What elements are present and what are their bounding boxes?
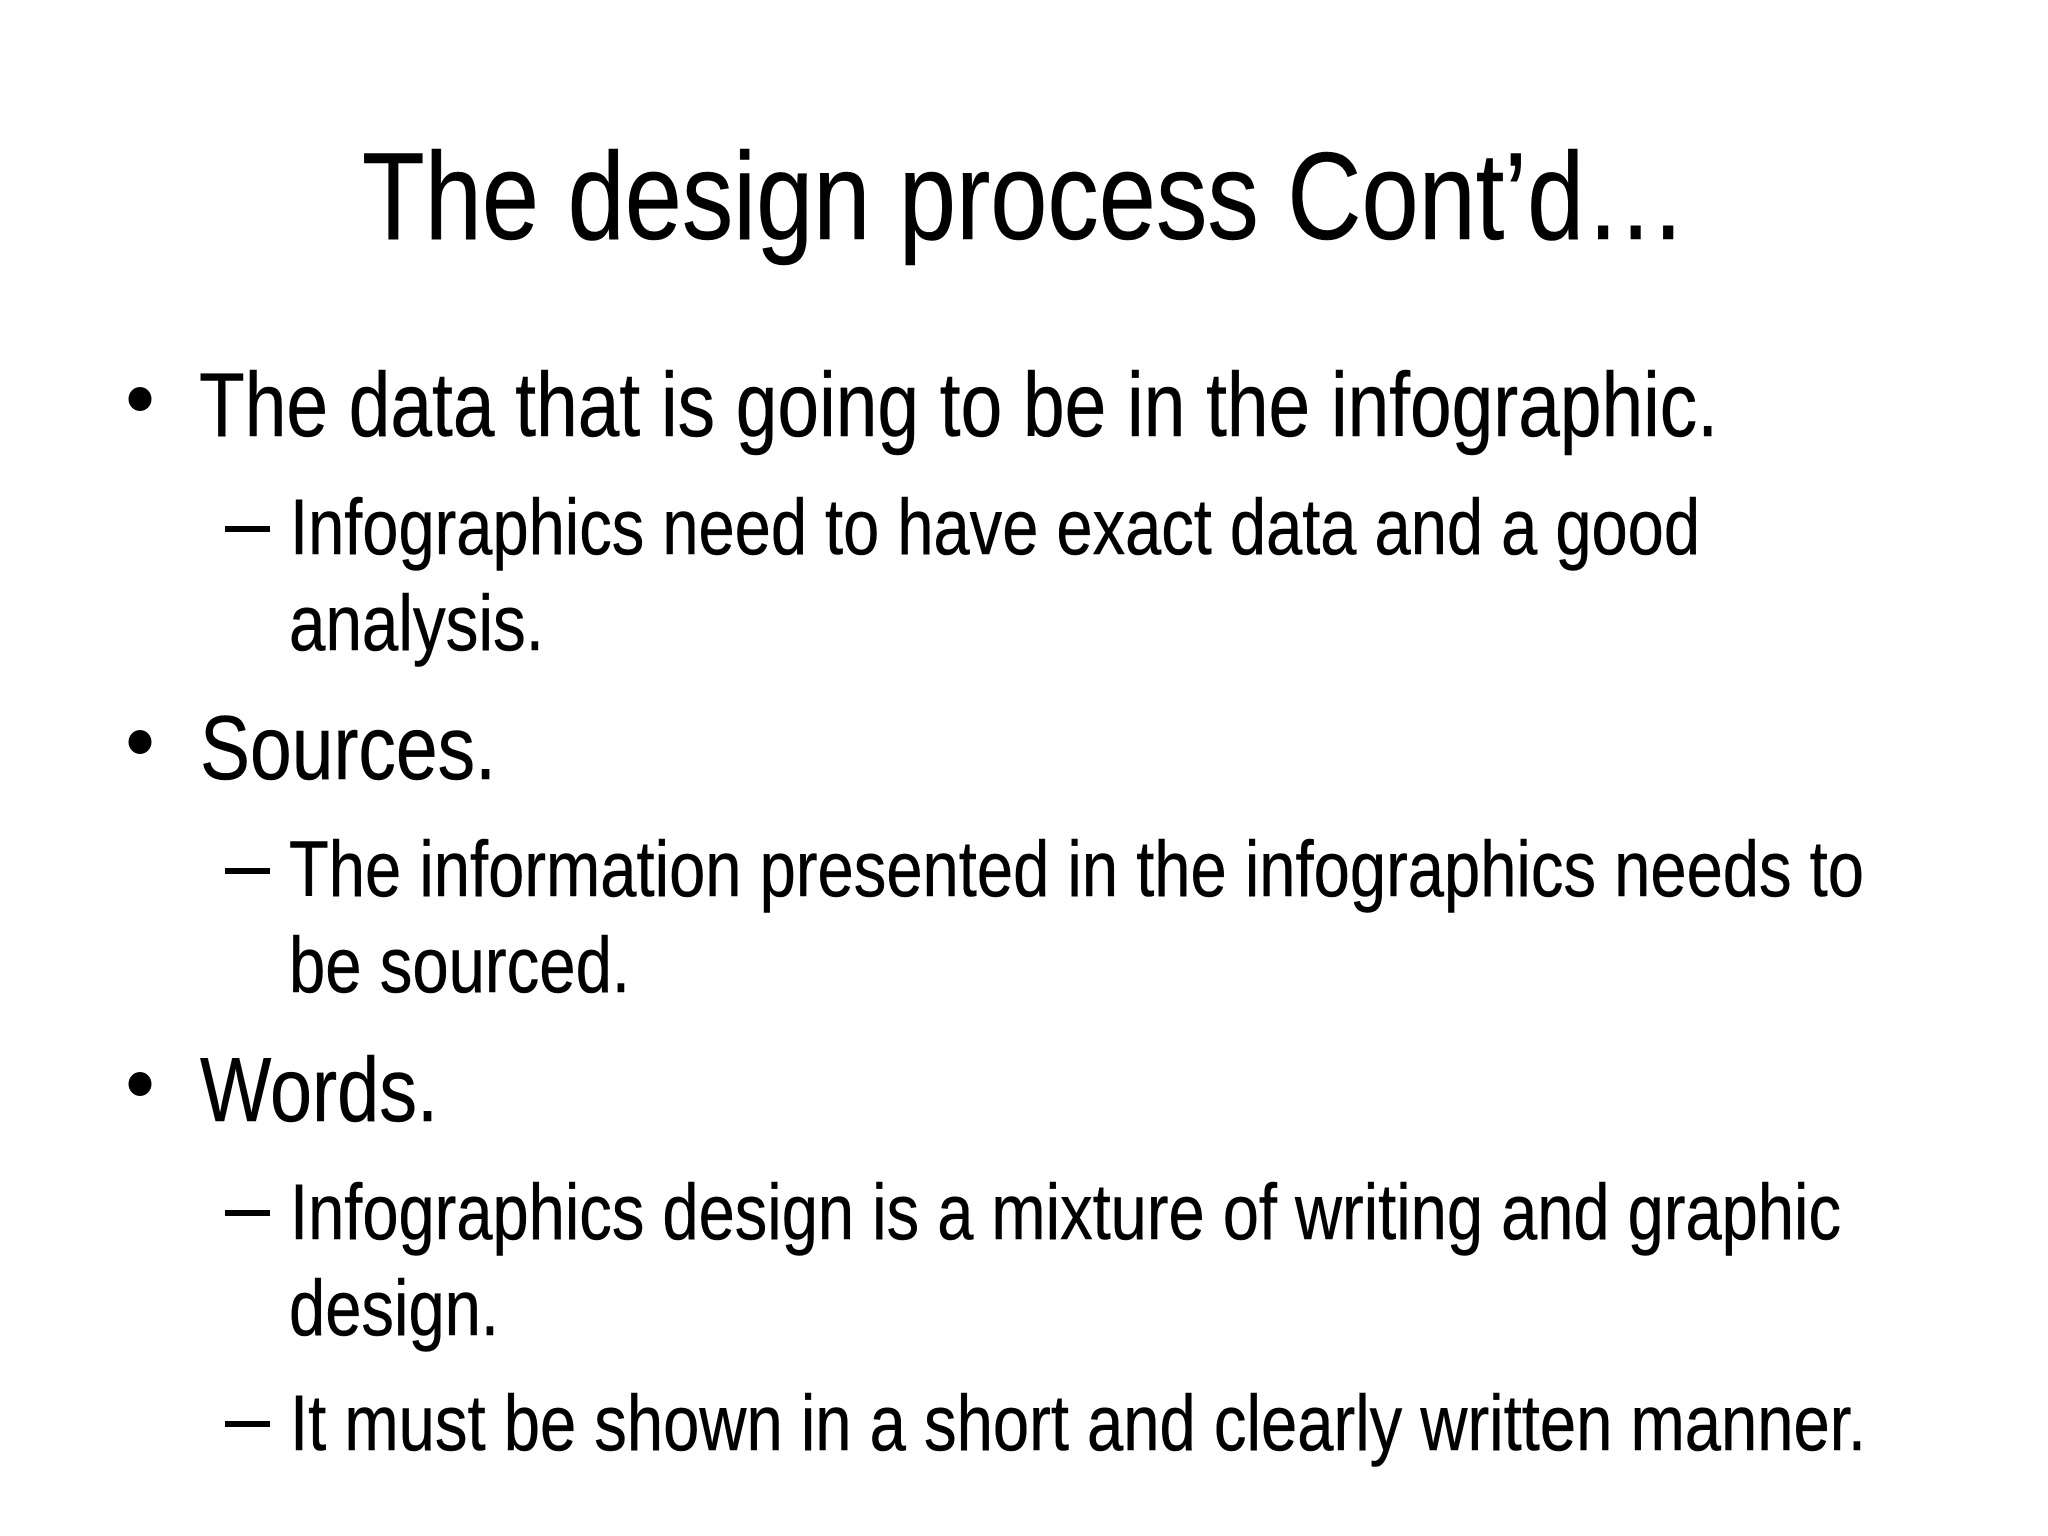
text: data detail continued: analysis. [289,578,544,667]
heading: words: Words. [200,1040,438,1141]
section: data [128,355,1718,667]
text: sources detail continued: be sourced. [289,920,630,1009]
dash: words detail two [225,1421,270,1427]
bullet: sources [128,730,152,754]
text: words detail one continued: design. [289,1263,499,1352]
title: The design process Cont’d… [362,128,1687,266]
bullet: words [128,1072,152,1096]
heading: data: The data that is going to be in the infographic. [199,355,1718,456]
section: sources [128,698,1864,1009]
heading: sources: Sources. [200,698,496,799]
dash: sources detail [225,868,270,874]
dash: words detail one [225,1210,270,1216]
text: data detail: Infographics need to have exact data and a good [290,482,1700,571]
bullet: data [128,387,152,411]
dash: data detail [225,526,270,532]
section: words [128,1040,1866,1467]
